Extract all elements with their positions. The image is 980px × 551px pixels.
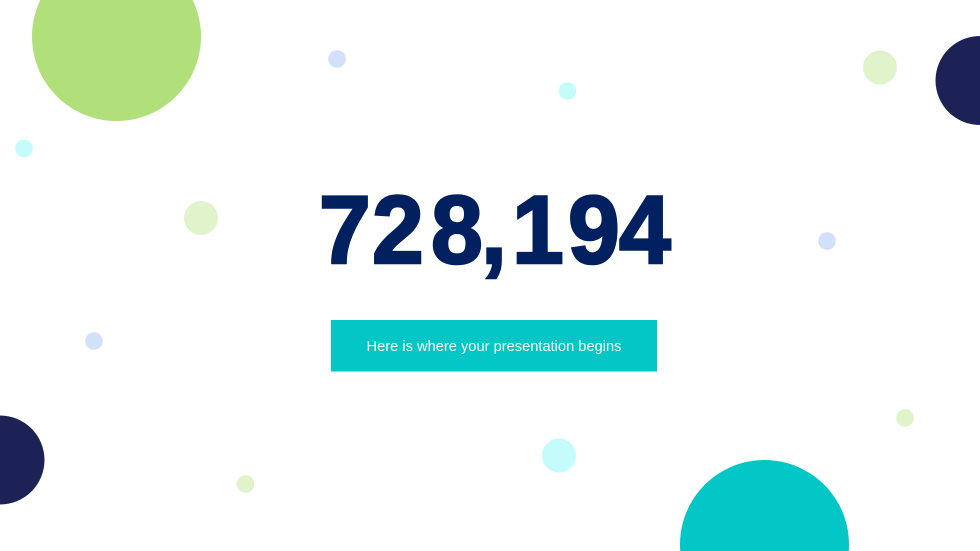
pale green dot, bottom left xyxy=(237,475,254,493)
large navy circle, bottom left xyxy=(0,416,44,504)
pale cyan dot, top centre xyxy=(559,82,576,100)
pale blue dot, lower left xyxy=(85,332,103,350)
main number: 728,194 xyxy=(319,176,671,284)
pale cyan dot, bottom centre xyxy=(542,438,576,472)
large teal circle, bottom right xyxy=(680,460,849,551)
banner background xyxy=(331,320,657,372)
banner text: Here is where your presentation begins xyxy=(366,338,622,355)
subtitle banner xyxy=(331,320,657,372)
pale blue dot, right xyxy=(818,232,836,250)
large navy circle, top right xyxy=(936,36,980,125)
pale green dot, lower right xyxy=(896,409,914,427)
pale green dot, left xyxy=(184,201,218,235)
large green circle, top left xyxy=(32,0,201,121)
pale cyan dot, left xyxy=(15,140,33,157)
pale blue dot, top centre xyxy=(328,50,346,68)
pale green dot, top right xyxy=(863,50,897,84)
